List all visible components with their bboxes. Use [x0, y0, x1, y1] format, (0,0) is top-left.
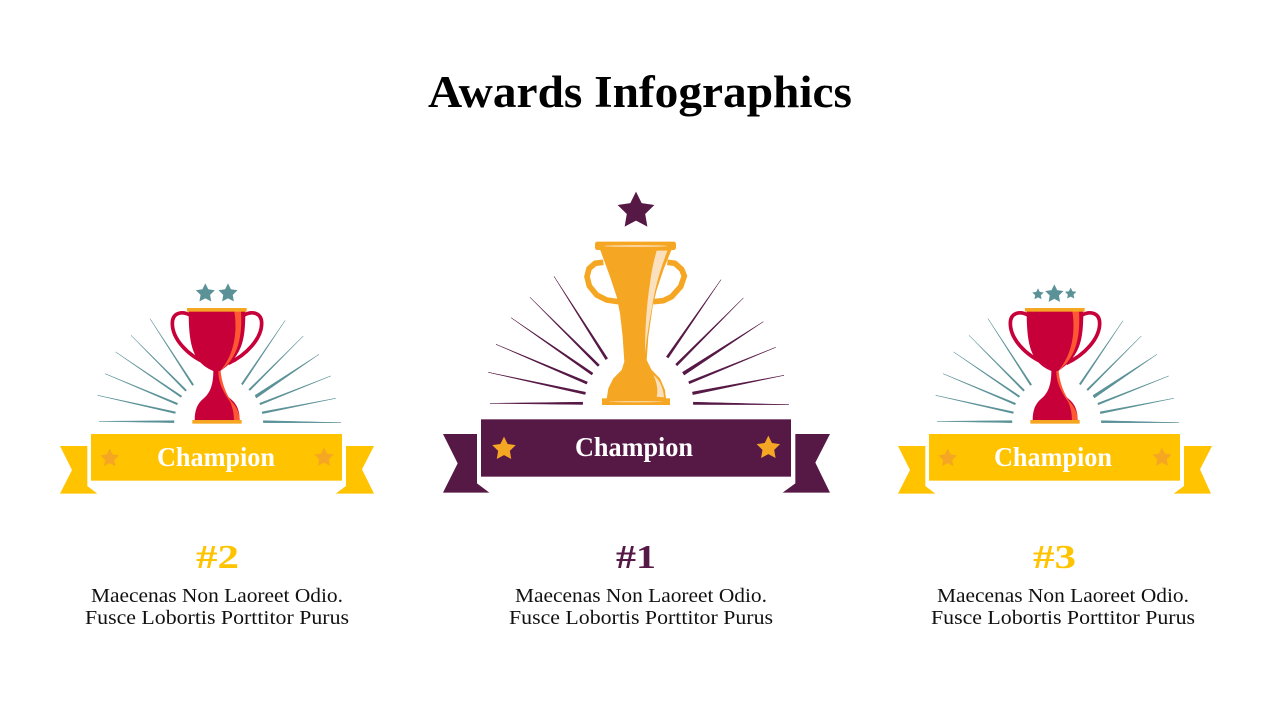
panel: first place: [443, 192, 830, 629]
third place award graphic: [898, 284, 1212, 494]
banner label: Champion: [994, 442, 1112, 472]
first place award graphic: [443, 192, 830, 493]
rank number: #1: [616, 539, 656, 576]
rank number: #2: [196, 539, 239, 576]
sunburst rays: [488, 276, 789, 405]
rank number: #3: [1033, 539, 1076, 576]
description: Maecenas Non Laoreet Odio.: [937, 585, 1189, 607]
description: Fusce Lobortis Porttitor Purus: [509, 607, 773, 629]
banner label: Champion: [157, 442, 275, 472]
description: Maecenas Non Laoreet Odio.: [91, 585, 343, 607]
banner label: Champion: [575, 432, 693, 462]
icon: star: [618, 192, 654, 227]
ribbon banner: [443, 419, 830, 493]
icon: three stars: [1032, 284, 1076, 302]
sunburst rays: [98, 319, 341, 423]
description: Fusce Lobortis Porttitor Purus: [931, 607, 1195, 629]
panel: second place: [60, 283, 374, 629]
icon: gold trophy: [587, 242, 684, 405]
description: [509, 585, 773, 629]
description: Maecenas Non Laoreet Odio.: [515, 585, 767, 607]
icon: red trophy: [172, 308, 262, 424]
icon: red trophy: [1010, 308, 1100, 424]
panel: third place: [898, 284, 1212, 629]
title: Awards Infographics: [428, 67, 852, 117]
sunburst rays: [936, 319, 1179, 423]
ribbon banner: [898, 434, 1212, 494]
description: Fusce Lobortis Porttitor Purus: [85, 607, 349, 629]
description: [85, 585, 349, 629]
second place award graphic: [60, 283, 374, 494]
ribbon banner: [60, 434, 374, 494]
icon: two stars: [196, 283, 238, 301]
description: [931, 585, 1195, 629]
